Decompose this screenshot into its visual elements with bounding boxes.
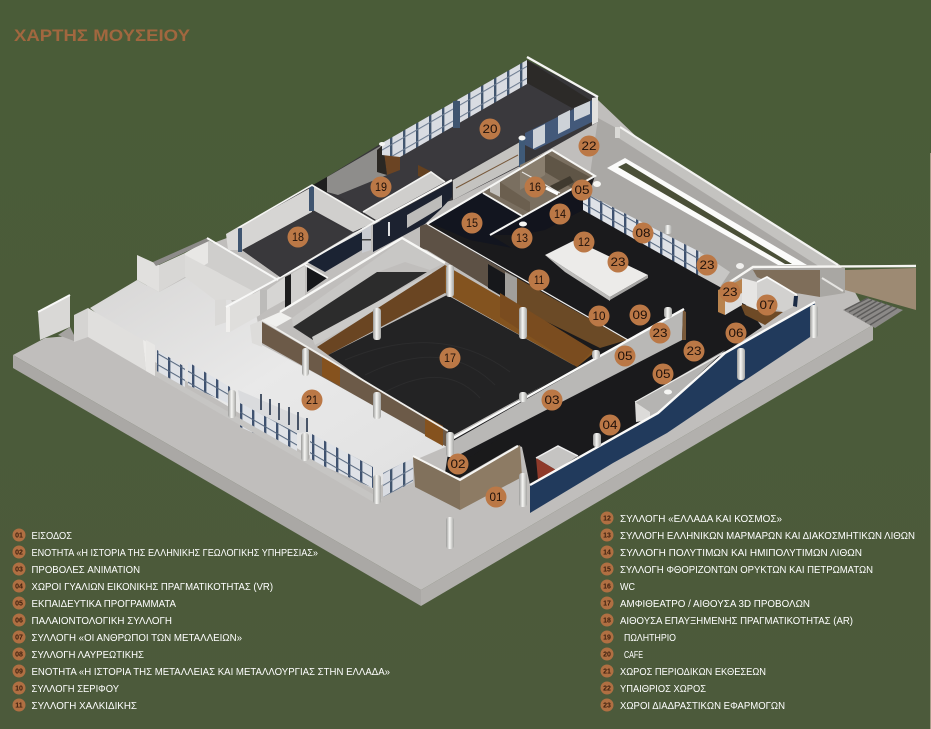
isometric museum floor plan xyxy=(13,57,916,606)
room 18 xyxy=(226,185,375,277)
map markers: 18 xyxy=(292,230,304,244)
legend item 12: 12 xyxy=(603,516,611,522)
legend item 17: ΑΜΦΙΘΕΑΤΡΟ / ΑΙΘΟΥΣΑ 3D ΠΡΟΒΟΛΩΝ xyxy=(620,598,810,610)
map markers: 13 xyxy=(516,231,528,245)
stairs xyxy=(843,298,903,328)
title: ΧΑΡΤΗΣ ΜΟΥΣΕΙΟΥ xyxy=(14,26,191,45)
map markers: 23 xyxy=(722,285,738,299)
outdoor space 22 xyxy=(583,118,838,300)
legend item 17: 17 xyxy=(603,600,611,608)
map markers: 21 xyxy=(306,393,318,407)
legend item 13: 13 xyxy=(603,532,611,540)
small white room beside blue wall xyxy=(635,350,725,422)
legend item 07: 07 xyxy=(15,634,23,642)
legend item 20: CAFE xyxy=(624,649,643,661)
glass wall 08 xyxy=(583,192,730,287)
map markers: 03 xyxy=(544,393,560,407)
map markers: 23 xyxy=(700,258,715,272)
legend item 04: ΧΩΡΟΙ ΓΥΑΛΙΩΝ ΕΙΚΟΝΙΚΗΣ ΠΡΑΓΜΑΤΙΚΟΤΗΤΑΣ (VR) xyxy=(32,581,273,593)
legend item 11: 11 xyxy=(15,702,23,710)
amphitheatre floor 17 xyxy=(328,295,577,438)
legend item 23: 23 xyxy=(603,702,611,710)
legend item 10: 10 xyxy=(15,686,23,692)
map markers: 08 xyxy=(636,226,651,240)
map markers: 20 xyxy=(482,122,498,136)
legend item 01: ΕΙΣΟΔΟΣ xyxy=(32,530,72,542)
floor: exhibition area 21 xyxy=(90,262,450,490)
map markers: 15 xyxy=(466,216,478,230)
legend item 22: ΥΠΑΙΘΡΙΟΣ ΧΩΡΟΣ xyxy=(620,683,706,695)
room 17 front brown wall xyxy=(250,320,448,447)
legend item 03: ΠΡΟΒΟΛΕΣ ANIMATION xyxy=(32,564,140,576)
legend item 09: 09 xyxy=(15,668,23,676)
columns xyxy=(228,142,818,549)
map markers: 06 xyxy=(728,326,744,340)
legend item 23: ΧΩΡΟΙ ΔΙΑΔΡΑΣΤΙΚΩΝ ΕΦΑΡΜΟΓΩΝ xyxy=(620,700,785,712)
legend item 21: 21 xyxy=(603,668,611,676)
map markers: 16 xyxy=(529,180,541,194)
legend item 07: ΣΥΛΛΟΓΗ «ΟΙ ΑΝΘΡΩΠΟΙ ΤΩΝ ΜΕΤΑΛΛΕΙΩΝ» xyxy=(32,632,242,644)
map markers: 09 xyxy=(632,308,648,322)
entrance brown walls 02 xyxy=(413,438,522,510)
map markers: 07 xyxy=(760,298,775,312)
legend item 02: 02 xyxy=(15,550,23,556)
map markers: 19 xyxy=(375,180,387,194)
glass wall 21 xyxy=(146,340,413,503)
right brown walls xyxy=(730,266,916,310)
legend item 03: 03 xyxy=(15,566,23,574)
legend item 06: ΠΑΛΑΙΟΝΤΟΛΟΓΙΚΗ ΣΥΛΛΟΓΗ xyxy=(32,615,172,627)
WC 16 rooms xyxy=(427,150,595,235)
legend item 15: ΣΥΛΛΟΓΗ ΦΘΟΡΙΖΟΝΤΩΝ ΟΡΥΚΤΩΝ ΚΑΙ ΠΕΤΡΩΜΑΤΩΝ xyxy=(620,564,873,576)
map markers: 23 xyxy=(686,344,702,358)
map markers: 05 xyxy=(656,367,671,381)
map markers: 05 xyxy=(574,183,590,197)
legend item 05: 05 xyxy=(15,600,23,608)
brown wall 11 xyxy=(420,224,628,348)
map markers: 14 xyxy=(554,207,566,221)
legend item 01: 01 xyxy=(15,532,23,540)
legend item 08: 08 xyxy=(15,652,23,658)
legend item 14: ΣΥΛΛΟΓΗ ΠΟΛΥΤΙΜΩΝ ΚΑΙ ΗΜΙΠΟΛΥΤΙΜΩΝ ΛΙΘΩΝ xyxy=(620,547,862,559)
central display platform 12 xyxy=(545,240,648,301)
small room with red wall xyxy=(536,446,578,480)
legend item 09: ΕΝΟΤΗΤΑ «Η ΙΣΤΟΡΙΑ ΤΗΣ ΜΕΤΑΛΛΕΙΑΣ ΚΑΙ ΜΕΤΑΛΛΟΥΡΓΙΑΣ ΣΤΗΝ ΕΛΛΑΔΑ» xyxy=(32,666,390,678)
legend item 16: WC xyxy=(620,581,635,593)
legend item 18: 18 xyxy=(603,618,611,624)
blue wall xyxy=(530,302,815,513)
legend item 10: ΣΥΛΛΟΓΗ ΣΕΡΙΦΟΥ xyxy=(32,683,119,695)
map markers xyxy=(288,118,778,508)
legend item 16: 16 xyxy=(603,584,611,590)
legend item 19: 19 xyxy=(603,634,611,642)
legend item 21: ΧΩΡΟΣ ΠΕΡΙΟΔΙΚΩΝ ΕΚΘΕΣΕΩΝ xyxy=(620,666,766,678)
legend item 20: 20 xyxy=(603,652,611,658)
legend: right column xyxy=(600,512,915,712)
map markers: 23 xyxy=(652,326,668,340)
legend item 04: 04 xyxy=(15,584,23,590)
legend item 12: ΣΥΛΛΟΓΗ «ΕΛΛΑΔΑ ΚΑΙ ΚΟΣΜΟΣ» xyxy=(620,513,782,525)
legend item 02: ΕΝΟΤΗΤΑ «Η ΙΣΤΟΡΙΑ ΤΗΣ ΕΛΛΗΝΙΚΗΣ ΓΕΩΛΟΓΙΚΗΣ ΥΠΗΡΕΣΙΑΣ» xyxy=(32,547,318,559)
legend item 05: ΕΚΠΑΙΔΕΥΤΙΚΑ ΠΡΟΓΡΑΜΜΑΤΑ xyxy=(32,598,176,610)
legend item 20 xyxy=(600,648,643,661)
map markers: 23 xyxy=(610,255,626,269)
room 17 seating and walls xyxy=(262,238,445,355)
map markers: 02 xyxy=(450,457,466,471)
map markers: 12 xyxy=(578,235,590,249)
shop counter wall xyxy=(363,172,445,220)
legend item 06: 06 xyxy=(15,618,23,624)
map markers: 11 xyxy=(534,273,544,287)
map markers: 04 xyxy=(602,418,618,432)
room 17 wood wall xyxy=(445,265,595,367)
wall 03 xyxy=(450,309,686,458)
base platform xyxy=(13,100,873,606)
cafe 20 and shop 19 floor xyxy=(238,60,598,277)
map markers: 01 xyxy=(490,490,503,504)
map markers: 17 xyxy=(444,351,456,365)
legend item 19 xyxy=(600,630,676,644)
legend item 14: 14 xyxy=(603,550,611,556)
legend item 22 xyxy=(600,682,706,695)
legend item 18: ΑΙΘΟΥΣΑ ΕΠΑΥΞΗΜΕΝΗΣ ΠΡΑΓΜΑΤΙΚΟΤΗΤΑΣ (AR) xyxy=(620,615,853,627)
map markers: 10 xyxy=(592,309,606,323)
room 07 xyxy=(718,277,798,325)
legend item 08: ΣΥΛΛΟΓΗ ΛΑΥΡΕΩΤΙΚΗΣ xyxy=(32,649,144,661)
legend item 19: ΠΩΛΗΤΗΡΙΟ xyxy=(624,632,676,644)
map markers: 05 xyxy=(618,349,633,363)
legend: left column xyxy=(12,528,390,712)
shop shelves xyxy=(313,145,432,196)
legend item 16 xyxy=(600,580,635,593)
legend item 15: 15 xyxy=(603,566,611,574)
navy partition wall xyxy=(307,180,452,272)
legend item 11: ΣΥΛΛΟΓΗ ΧΑΛΚΙΔΙΚΗΣ xyxy=(32,700,137,712)
legend item 01 xyxy=(12,528,72,542)
legend item 22: 22 xyxy=(603,686,611,692)
legend item 10 xyxy=(12,682,119,695)
left outbuildings xyxy=(38,232,363,376)
cafe glass facade xyxy=(382,57,598,200)
main dark floor xyxy=(427,150,762,485)
map markers: 22 xyxy=(582,139,597,153)
